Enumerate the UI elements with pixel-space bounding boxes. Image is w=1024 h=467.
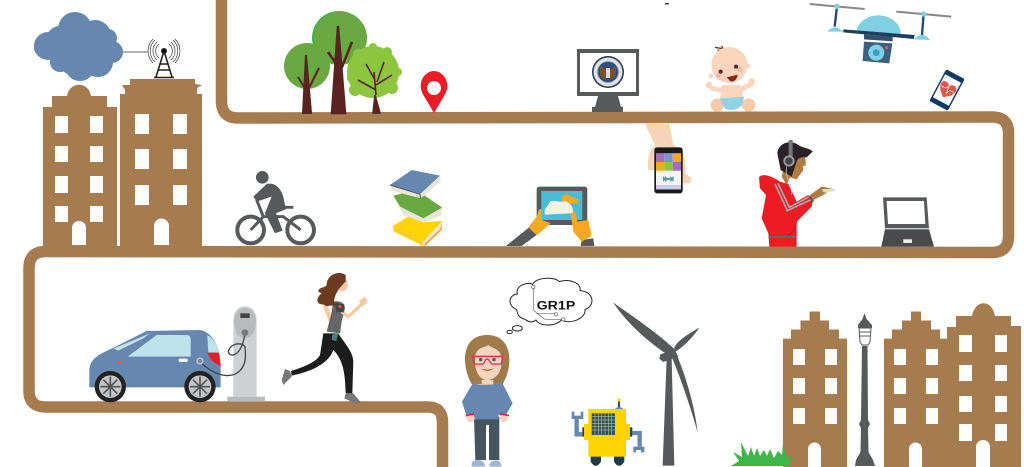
icon: location pin xyxy=(421,71,447,113)
icon: street lamp xyxy=(855,313,875,466)
thought bubble with GR1P xyxy=(507,278,592,334)
icon: monitor with seal xyxy=(577,49,639,112)
icon: cyclist xyxy=(237,171,314,243)
bottom right windows xyxy=(793,335,1007,467)
left apartment buildings xyxy=(43,79,202,247)
icon: drone xyxy=(810,4,951,63)
icon: runner xyxy=(282,273,368,403)
icon: hand holding phone xyxy=(645,124,692,193)
building windows xyxy=(55,114,187,245)
icon: baby xyxy=(706,46,755,112)
icon: trees xyxy=(284,11,402,113)
small mark xyxy=(665,3,669,4)
connector line xyxy=(123,51,148,53)
icon: wind turbine xyxy=(613,302,699,466)
icon: yellow robot xyxy=(572,398,644,466)
icon: antenna xyxy=(148,39,180,78)
icon: laptop xyxy=(881,197,934,247)
icon: grass xyxy=(731,442,795,466)
icon: woman with glasses xyxy=(462,335,513,467)
icon: electric car and charger xyxy=(89,306,265,402)
icon: tablet with hands xyxy=(506,187,594,246)
icon: man with headphones xyxy=(759,140,835,247)
icon: cloud xyxy=(34,12,123,81)
icon: heart phone xyxy=(929,69,965,111)
bottom right buildings xyxy=(783,303,1021,467)
thought bubble with GR1P: GR1P xyxy=(537,298,575,312)
icon: stack of books xyxy=(390,170,442,246)
